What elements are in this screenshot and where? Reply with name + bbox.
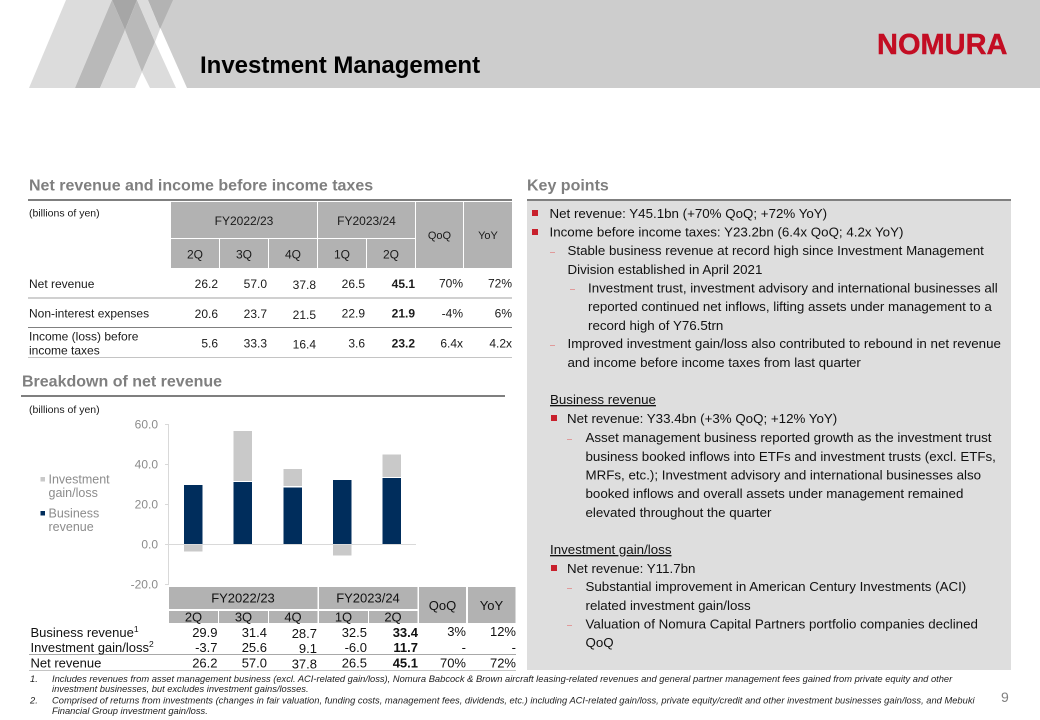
panel: key points xyxy=(527,199,1011,670)
summary bullets: Stable business revenue at record high since Investment Management xyxy=(568,243,984,258)
row: investment gain/loss: Investment gain/loss xyxy=(30,640,149,655)
row: net revenue: 45.1 xyxy=(393,656,418,670)
y axis labels: 60.0 xyxy=(135,418,158,432)
row: net revenue: 70% xyxy=(440,656,466,670)
row: non-interest expenses xyxy=(29,306,512,322)
business revenue section: Business revenue xyxy=(550,392,656,407)
legend xyxy=(40,472,110,534)
table header xyxy=(171,202,512,268)
row: business revenue: 3% xyxy=(447,624,466,639)
business revenue section: business booked inflows into ETFs and investment trusts (excl. ETFs, xyxy=(586,449,996,464)
y axis labels xyxy=(131,418,158,592)
footnotes: Financial Group investment gain/loss. xyxy=(52,706,208,716)
investment gain/loss section: Substantial improvement in American Century Investments (ACI) xyxy=(586,579,966,594)
row: non-interest expenses: Non-interest expenses xyxy=(29,306,149,320)
investment gain/loss section: QoQ xyxy=(586,635,614,650)
summary bullets: Income before income taxes: Y23.2bn (6.4x QoQ; 4.2x YoY) xyxy=(550,224,903,240)
table header: 3Q xyxy=(235,610,252,624)
summary bullets: Improved investment gain/loss also contributed to rebound in net revenue xyxy=(568,336,1001,351)
table header: 4Q xyxy=(285,248,301,262)
legend: gain/loss xyxy=(48,486,98,500)
row: net revenue: 57.0 xyxy=(242,656,267,670)
row: business revenue: 28.7 xyxy=(292,626,317,641)
footnotes xyxy=(29,674,975,716)
summary bullets: Division established in April 2021 xyxy=(568,262,762,277)
footnotes: 2. xyxy=(29,696,38,706)
row: net revenue: 70% xyxy=(439,276,463,290)
business revenue section: Net revenue: Y33.4bn (+3% QoQ; +12% YoY) xyxy=(567,411,837,426)
row: investment gain/loss: - xyxy=(512,640,516,655)
y axis labels: -20.0 xyxy=(131,578,158,592)
row: business revenue xyxy=(30,624,516,641)
row: income before income taxes: 6.4x xyxy=(440,336,463,350)
row: net revenue: 26.5 xyxy=(342,656,367,670)
row: non-interest expenses: 23.7 xyxy=(244,307,267,321)
row: business revenue: 12% xyxy=(490,624,516,639)
business revenue section: booked inflows and overall assets under management remained xyxy=(586,486,963,501)
table header: 2Q xyxy=(384,610,402,624)
investment gain/loss section: Valuation of Nomura Capital Partners portfolio companies declined xyxy=(586,616,978,632)
row: net revenue xyxy=(29,276,512,292)
table header: YoY xyxy=(480,598,504,613)
page number: 9 xyxy=(1001,689,1009,705)
bar: FY2022/23 2Q xyxy=(184,485,202,552)
table header: FY2023/24 xyxy=(336,590,400,606)
row: business revenue: 31.4 xyxy=(242,625,267,640)
row: net revenue xyxy=(30,656,516,672)
row: net revenue: 26.2 xyxy=(192,656,218,670)
summary bullets: and income before income taxes from last quarter xyxy=(568,355,861,370)
table header: 1Q xyxy=(334,248,350,262)
row: investment gain/loss: 9.1 xyxy=(299,641,317,656)
business revenue section xyxy=(550,392,996,520)
row: net revenue: 26.5 xyxy=(342,277,365,291)
row: net revenue: 37.8 xyxy=(293,278,316,292)
footnotes: 1. xyxy=(30,674,38,684)
investment gain/loss section: related investment gain/loss xyxy=(586,598,751,613)
summary bullets xyxy=(532,206,1001,370)
row: income before income taxes: 3.6 xyxy=(348,336,365,350)
row: investment gain/loss: - xyxy=(462,640,466,655)
bar chart: breakdown of net revenue xyxy=(40,418,416,592)
business revenue section: elevated throughout the quarter xyxy=(586,505,772,520)
row: business revenue: 32.5 xyxy=(342,625,367,640)
legend: revenue xyxy=(48,520,94,534)
row: non-interest expenses: 21.9 xyxy=(392,306,415,320)
table header: 2Q xyxy=(187,248,203,262)
row: business revenue: 29.9 xyxy=(192,625,218,640)
table header: QoQ xyxy=(428,230,452,242)
row: non-interest expenses: 22.9 xyxy=(342,306,365,320)
row: investment gain/loss: -3.7 xyxy=(195,640,218,655)
row: income before income taxes: income taxes xyxy=(29,344,100,358)
summary bullets: record high of Y76.5trn xyxy=(588,318,723,333)
summary bullets: Investment trust, investment advisory and international businesses all xyxy=(588,280,998,296)
row: income before income taxes: 4.2x xyxy=(489,336,512,350)
row: income before income taxes: Income (loss) before xyxy=(29,330,139,344)
investment gain/loss section: Net revenue: Y11.7bn xyxy=(567,561,695,576)
chart unit note: (billions of yen) xyxy=(29,404,100,416)
footnotes: investment businesses, but excludes investment gains/losses. xyxy=(52,684,309,694)
row: investment gain/loss: 2 xyxy=(149,639,154,649)
row: non-interest expenses: 21.5 xyxy=(293,308,316,322)
row: net revenue: Net revenue xyxy=(30,656,101,670)
row: income before income taxes: 5.6 xyxy=(201,336,218,350)
table header: 2Q xyxy=(185,610,202,624)
y axis labels: 20.0 xyxy=(135,498,158,512)
row: non-interest expenses: 20.6 xyxy=(195,307,218,321)
table header: FY2022/23 xyxy=(211,590,275,606)
table header: QoQ xyxy=(429,598,456,613)
y axis labels: 0.0 xyxy=(141,538,158,552)
table unit note: (billions of yen) xyxy=(29,208,100,220)
row: income before income taxes: 23.2 xyxy=(392,336,415,350)
row: non-interest expenses: 6% xyxy=(495,306,512,320)
logo: Nomura: NOMURA xyxy=(877,29,1008,61)
row: net revenue: 57.0 xyxy=(244,277,267,291)
table header: 3Q xyxy=(236,248,252,262)
table header: 4Q xyxy=(284,610,302,624)
table header: FY2022/23 xyxy=(215,214,274,228)
business revenue section: MRFs, etc.); Investment advisory and international businesses also xyxy=(586,468,981,482)
business revenue section: Asset management business reported growth as the investment trust xyxy=(586,430,992,445)
row: net revenue: 26.2 xyxy=(195,277,218,291)
row: business revenue: 1 xyxy=(134,624,139,634)
table: breakdown of net revenue xyxy=(29,587,516,672)
heading: key points: Key points xyxy=(527,178,609,194)
row: net revenue: 45.1 xyxy=(392,277,415,291)
bar: FY2023/24 1Q xyxy=(333,480,352,556)
row: net revenue: 72% xyxy=(490,656,516,670)
table header: FY2023/24 xyxy=(337,214,396,228)
row: investment gain/loss xyxy=(30,639,516,656)
row: investment gain/loss: 25.6 xyxy=(242,640,267,655)
row: income before income taxes: 16.4 xyxy=(293,338,316,352)
y axis labels: 40.0 xyxy=(135,458,158,472)
summary bullets: reported continued net inflows, lifting assets under management to a xyxy=(588,299,992,314)
row: investment gain/loss: 11.7 xyxy=(393,640,418,655)
footnotes: Includes revenues from asset management business (excl. ACI-related gain/loss), Nomura Babcock & Brown aircraft leasing-related revenues and general partner management fees gained from private equity and other xyxy=(52,674,953,684)
table: net revenue and income before income taxes xyxy=(28,202,512,358)
table header: YoY xyxy=(478,230,499,242)
title: Investment Management xyxy=(200,52,480,79)
heading: net revenue and income: Net revenue and income before income taxes xyxy=(29,178,373,194)
table header xyxy=(169,587,516,624)
row: investment gain/loss: -6.0 xyxy=(345,640,367,655)
header band xyxy=(29,0,1040,88)
row: net revenue: 37.8 xyxy=(292,656,317,672)
legend: Business xyxy=(48,506,99,520)
row: income before income taxes: 33.3 xyxy=(244,336,267,350)
investment gain/loss section xyxy=(550,542,978,650)
footnotes: Comprised of returns from investments (changes in fair valuation, funding costs, management fees, dividends, etc.) including ACI-related gain/loss, private equity/credit and other investment businesses gain/loss, and Mebuki xyxy=(52,696,975,706)
summary bullets: Net revenue: Y45.1bn (+70% QoQ; +72% YoY) xyxy=(550,206,827,221)
table header: 2Q xyxy=(383,248,399,262)
bar: FY2023/24 2Q xyxy=(382,454,401,544)
row: business revenue: Business revenue xyxy=(30,625,134,640)
row: income before income taxes xyxy=(29,330,512,358)
legend: Investment xyxy=(48,472,110,486)
bar: FY2022/23 3Q xyxy=(234,431,252,544)
row: business revenue: 33.4 xyxy=(393,625,419,640)
row: non-interest expenses: -4% xyxy=(442,306,463,320)
table header: 1Q xyxy=(335,610,352,624)
row: net revenue: Net revenue xyxy=(29,277,95,291)
investment gain/loss section: Investment gain/loss xyxy=(550,542,672,557)
bar: FY2022/23 4Q xyxy=(284,469,302,544)
heading: breakdown of net revenue: Breakdown of net revenue xyxy=(22,374,222,390)
row: net revenue: 72% xyxy=(488,276,512,290)
